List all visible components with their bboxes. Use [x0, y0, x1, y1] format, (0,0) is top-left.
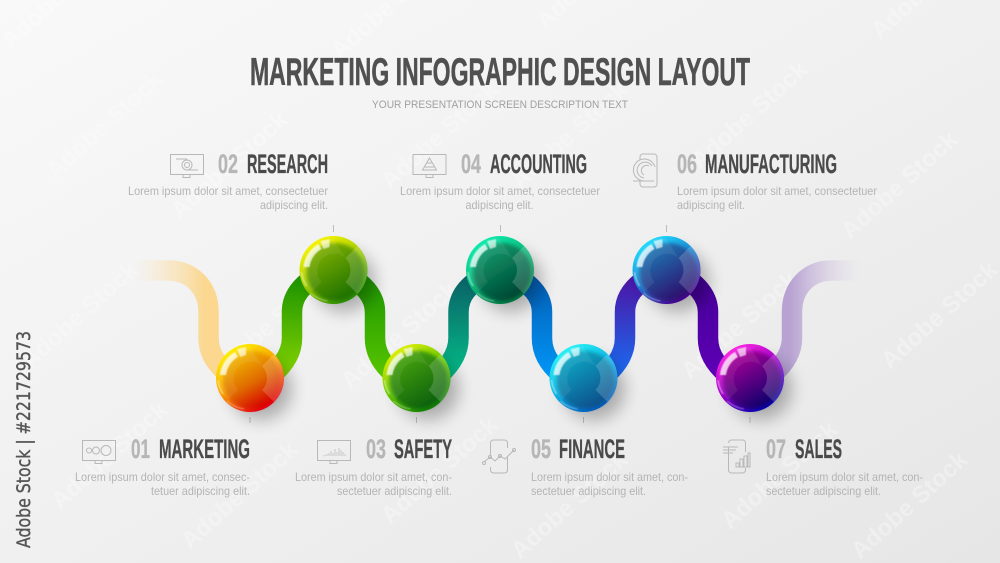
- wavy ribbon path: [130, 270, 870, 382]
- text: Adobe Stock: [166, 106, 294, 224]
- text: Adobe Stock: [16, 256, 144, 374]
- text: Adobe Stock: [376, 411, 504, 529]
- description: adipiscing elit.: [677, 198, 745, 212]
- text: Adobe Stock: [376, 76, 504, 194]
- number: 03: [366, 434, 386, 464]
- text: Adobe Stock: [46, 396, 174, 514]
- heading: FINANCE: [559, 434, 625, 464]
- number: 04: [461, 149, 481, 179]
- subtitle: YOUR PRESENTATION SCREEN DESCRIPTION TEXT: [372, 99, 628, 111]
- description: Lorem ipsum dolor sit amet, con-: [766, 470, 923, 484]
- icon: phone with line chart: [482, 440, 516, 473]
- ball 01: [216, 344, 284, 412]
- heading: RESEARCH: [247, 149, 328, 179]
- panel: 07 sales: [723, 434, 923, 498]
- description: adipiscing elit.: [260, 198, 328, 212]
- text: Adobe Stock: [506, 446, 634, 563]
- heading: SAFETY: [394, 434, 452, 464]
- panel: 03 safety: [295, 434, 452, 498]
- text: Adobe Stock: [206, 266, 334, 384]
- description: adipiscing elit.: [466, 198, 534, 212]
- heading: MANUFACTURING: [705, 149, 837, 179]
- icon: monitor with pyramid: [413, 154, 446, 178]
- text: Adobe Stock: [716, 416, 844, 534]
- description: Lorem ipsum dolor sit amet, consec-: [75, 470, 250, 484]
- ball 06: [632, 236, 700, 304]
- description: Lorem ipsum dolor sit amet, con-: [531, 470, 688, 484]
- description: tetuer adipiscing elit.: [151, 484, 250, 498]
- heading: MARKETING: [159, 434, 250, 464]
- text: Adobe Stock: [506, 76, 634, 194]
- icon: phone with bars: [723, 440, 750, 473]
- number: 01: [131, 434, 150, 464]
- panel: 04 accounting: [400, 149, 600, 212]
- ball 05: [550, 344, 618, 412]
- text: Adobe Stock: [846, 446, 974, 563]
- text: Adobe Stock: [676, 266, 804, 384]
- description: sectetuer adipiscing elit.: [766, 484, 881, 498]
- text: Adobe Stock: [686, 56, 814, 174]
- text: Adobe Stock: [41, 66, 169, 184]
- description: sectetuer adipiscing elit.: [531, 484, 646, 498]
- ball 07: [716, 344, 784, 412]
- panel: 02 research: [128, 149, 328, 212]
- panel: 05 finance: [482, 434, 688, 498]
- stock id label: Adobe Stock | #221729573: [13, 331, 35, 548]
- text: Adobe Stock: [176, 436, 304, 554]
- text: Adobe Stock: [836, 126, 964, 244]
- icon: phone with arcs: [633, 154, 657, 187]
- ball shadows: [230, 250, 792, 420]
- icon: monitor with bars: [318, 440, 350, 464]
- description: Lorem ipsum dolor sit amet, consectetuer: [128, 184, 328, 198]
- description: Lorem ipsum dolor sit amet, consectetuer: [400, 184, 600, 198]
- number: 05: [531, 434, 551, 464]
- icon: monitor with circles: [82, 440, 116, 464]
- ball 03: [382, 344, 450, 412]
- number: 02: [218, 149, 238, 179]
- connector ticks: [250, 225, 750, 423]
- heading: SALES: [795, 434, 842, 464]
- text: Adobe Stock: [876, 256, 1000, 374]
- number: 06: [677, 149, 697, 179]
- icon: monitor with spiral: [170, 154, 204, 178]
- text: Adobe Stock: [336, 276, 464, 394]
- panel: 01 marketing: [75, 434, 250, 498]
- heading: ACCOUNTING: [490, 149, 587, 179]
- description: Lorem ipsum dolor sit amet, con-: [295, 470, 452, 484]
- description: sectetuer adipiscing elit.: [337, 484, 452, 498]
- number: 07: [766, 434, 786, 464]
- panel: 06 manufacturing: [633, 149, 877, 212]
- description: Lorem ipsum dolor sit amet, consectetuer: [677, 184, 877, 198]
- ball 02: [300, 236, 368, 304]
- ball 04: [466, 236, 534, 304]
